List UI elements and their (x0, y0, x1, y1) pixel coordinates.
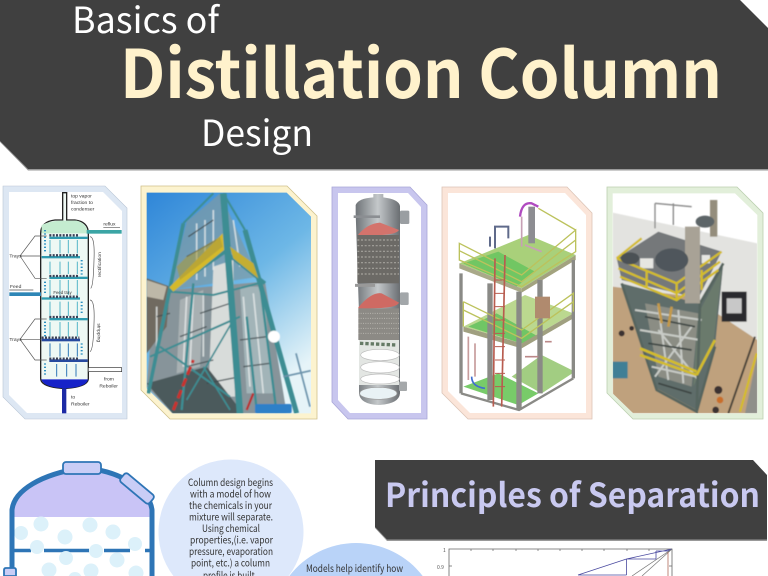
text circle: column design intro: the chemicals in your (189, 497, 272, 512)
panel: column schematic diagram: fraction to (71, 200, 93, 206)
header banner (0, 0, 768, 170)
chart: separation diagram: 1 (443, 547, 446, 554)
panel: photo of distillation tower against blue sky (141, 186, 317, 419)
panel: column schematic diagram: from (104, 377, 114, 383)
text circle: column design intro (158, 459, 304, 576)
panel: cutaway column illustration (332, 187, 427, 419)
panel: column schematic diagram: condenser (71, 207, 95, 213)
heading banner: Principles of Separation (375, 460, 767, 541)
tray (12, 549, 152, 552)
text circle: column design intro: properties,(i.e. vapor (190, 532, 273, 546)
bubbles (14, 516, 144, 576)
panel: column schematic diagram: to (71, 394, 75, 400)
top cap (63, 462, 101, 474)
chart: separation diagram: 0.9 (437, 564, 444, 571)
text circle: column design intro: point, etc.) a column (191, 554, 270, 570)
tank outline (12, 468, 152, 576)
panel: aerial photo of column skid (607, 187, 763, 419)
text circle: column design intro: Column design begins (188, 474, 273, 489)
text circle: column design intro: Using chemical (202, 520, 260, 535)
panel: column schematic diagram: Reboiler (71, 401, 90, 407)
text circle: column design intro: pressure, evaporation (189, 543, 273, 558)
heading banner: Principles of Separation: Principles of Separation (385, 469, 760, 517)
panel: column schematic diagram (3, 186, 127, 419)
panel: column schematic diagram: top vapor (71, 194, 92, 200)
panel: column schematic diagram: Trays (9, 337, 22, 343)
panel: column schematic diagram: Trays (9, 254, 22, 260)
panel: column schematic diagram: Feed (10, 284, 22, 290)
panel: 3D model of column structure (442, 187, 592, 419)
panel: column schematic diagram: Reboiler (99, 384, 118, 390)
tray bubbles (30, 537, 142, 565)
title line: Design: Design (201, 105, 313, 157)
text circle: models (289, 543, 423, 576)
panel: column schematic diagram: rectification (97, 252, 103, 277)
panel: column schematic diagram: stripping (95, 323, 101, 342)
side cap (119, 472, 155, 505)
panel: column schematic diagram: Feed tray (53, 290, 72, 295)
title line: Distillation Column: Distillation Column (120, 21, 722, 118)
icon: distillation tank illustration (4, 462, 155, 576)
text circle: column design intro: mixture will separate. (189, 508, 273, 524)
lower nozzle (4, 568, 16, 576)
text circle: models: Models help identify how (306, 560, 403, 575)
text circle: column design intro: with a model of how (190, 486, 271, 500)
panel: column schematic diagram: reflux (103, 221, 116, 227)
chart: separation diagram (437, 547, 672, 576)
